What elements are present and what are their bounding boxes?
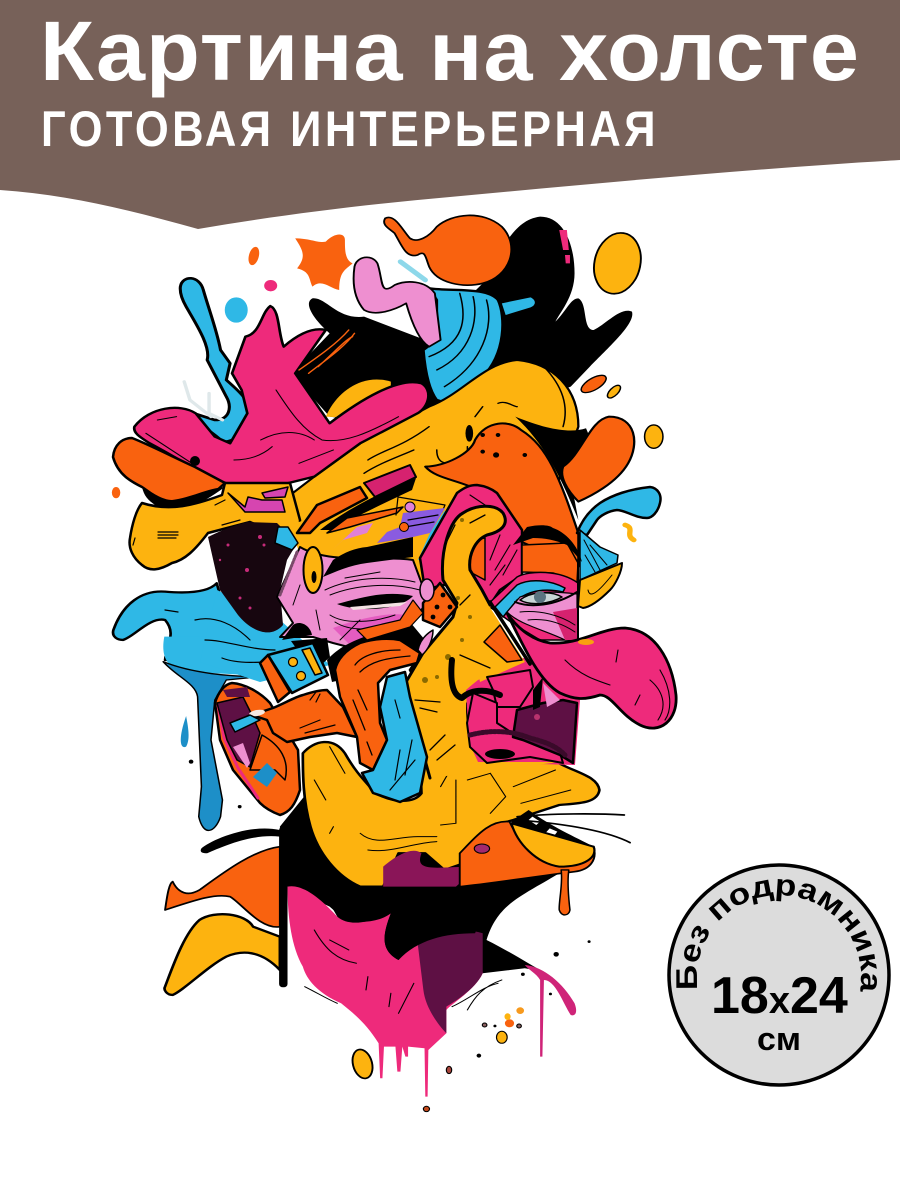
lip eye mark — [190, 456, 200, 466]
ear inner dark — [217, 697, 260, 767]
yellow backing behind brow — [290, 498, 445, 600]
subtitle: ГОТОВАЯ ИНТЕРЬЕРНАЯ — [41, 101, 659, 157]
right side curl, page coordinates — [577, 487, 661, 608]
dotted hair block — [208, 522, 297, 632]
dish lines — [429, 293, 489, 387]
blue drop — [181, 716, 189, 747]
pink splash contour lines — [146, 390, 399, 463]
lower left orange shape — [165, 847, 280, 927]
cheek hatching — [300, 692, 335, 733]
blue splash with fork — [180, 278, 251, 442]
neck hatch lines — [305, 930, 502, 1013]
small blue piece — [275, 527, 298, 550]
blue patch under hair — [200, 590, 330, 682]
hair stitching on face edge — [280, 552, 297, 595]
tongue hatching — [390, 700, 415, 790]
purple patch — [377, 508, 445, 543]
pink speckles — [219, 535, 266, 610]
forehead lines — [364, 367, 565, 473]
blue tongue — [362, 672, 427, 802]
black splash — [291, 217, 632, 433]
panel hatch — [470, 495, 517, 585]
black mouth — [511, 810, 594, 847]
yellow frame lines — [396, 497, 445, 515]
curved text: Без подрамника — [676, 879, 877, 992]
yellow behind pink — [326, 379, 391, 420]
light pink sliver — [543, 683, 560, 707]
light pink lip — [418, 630, 433, 655]
light pink eye area — [507, 592, 577, 640]
floating dots — [112, 246, 277, 498]
ear inner pink — [233, 743, 250, 768]
small yellow accent on nose — [578, 639, 594, 645]
drip tiny dots: black — [189, 760, 591, 1058]
chin contour lines — [314, 747, 571, 851]
badge circle — [669, 865, 889, 1085]
black drip in neck — [330, 897, 487, 960]
black nose cheek — [533, 677, 543, 710]
left face — [277, 547, 427, 650]
lip spot — [474, 844, 490, 853]
nose lower pink — [467, 693, 563, 763]
face edge line — [577, 560, 579, 640]
orange left lips — [113, 438, 225, 503]
orange hair strokes on black — [299, 330, 354, 373]
black diagonal — [490, 602, 530, 664]
orange head right — [425, 423, 578, 567]
lower lip orange — [460, 822, 595, 887]
swirl hatching — [353, 650, 410, 755]
yellow wedge backing — [468, 595, 525, 682]
orange wedge — [484, 625, 522, 662]
left lips and yellow arm, page coordinates — [113, 438, 300, 569]
white highlight — [296, 684, 337, 700]
face wrinkles — [293, 572, 420, 640]
upper artwork: splashes, hair, forehead — [112, 215, 663, 660]
pink outer panel — [420, 485, 522, 605]
badge: size without stretcher — [667, 863, 891, 1087]
right pink drip — [525, 965, 576, 1057]
title: Картина на холсте — [40, 4, 860, 98]
black band under lips — [142, 487, 225, 508]
oval pupil — [312, 571, 316, 583]
small floating ellipses right — [578, 372, 663, 448]
magenta marks on black — [559, 230, 570, 263]
nose upper pink — [487, 670, 533, 707]
nostril — [485, 749, 515, 759]
illustration: colourful abstract face — [112, 215, 676, 1112]
left vertical black bar — [279, 827, 288, 987]
small pink highlight dot — [534, 714, 540, 720]
orange block — [260, 655, 290, 702]
small blue pipe — [230, 715, 260, 732]
yellow lines — [415, 515, 490, 760]
right eyebrow — [513, 525, 582, 562]
pink big splash — [134, 306, 428, 483]
pink around eye — [487, 572, 578, 640]
arc path for curved text — [697, 895, 861, 990]
hot pink below eye — [553, 608, 577, 640]
dotted orange patch — [423, 583, 457, 627]
lip yellow — [511, 823, 594, 867]
orange band under eye — [357, 600, 423, 640]
purple stripes — [405, 515, 438, 527]
yellow bar on connector — [302, 648, 322, 675]
light pink curl — [354, 257, 441, 347]
face middle, page coordinates — [165, 465, 582, 802]
black streak — [201, 828, 280, 853]
orange cheek panel — [522, 543, 578, 583]
light blue stick — [400, 262, 425, 280]
ridge lines — [584, 540, 607, 572]
nose backing pink — [466, 655, 580, 765]
orange star — [295, 235, 353, 290]
eye lashes — [515, 592, 577, 605]
lower yellow oval — [350, 1048, 375, 1080]
orange brow block — [297, 487, 367, 533]
purple mouth bits — [383, 851, 475, 887]
size number: 18x24 — [711, 967, 848, 1025]
orange column — [470, 538, 485, 580]
main yellow forehead — [284, 360, 578, 533]
orange lip drip — [559, 870, 570, 915]
blue ridged piece — [580, 530, 618, 580]
arm lines — [133, 500, 240, 545]
yellow ridged piece — [578, 563, 622, 608]
lower orange dots — [423, 1007, 524, 1112]
head hair black — [515, 417, 594, 520]
small circles on patch — [400, 502, 415, 532]
orange cheek — [252, 690, 357, 742]
blue left blob — [113, 583, 280, 660]
dark purple neck shadow — [418, 931, 483, 1033]
black neck mass — [280, 793, 559, 1007]
banner shape — [0, 0, 900, 229]
blue eye band — [495, 581, 565, 617]
yellow circle — [589, 230, 646, 297]
black under eye band — [327, 622, 425, 682]
iris — [534, 591, 546, 603]
yellow S outline — [406, 506, 505, 778]
closed eye — [337, 594, 413, 609]
right blue curl — [577, 487, 661, 535]
yellow squiggle — [625, 525, 634, 540]
white tip of cheek — [249, 709, 265, 717]
yellow dots on connector — [288, 658, 306, 680]
ear inner blue — [253, 763, 277, 787]
magenta strip — [364, 465, 416, 497]
blue strip by brow — [418, 510, 445, 560]
unit: см — [757, 1021, 801, 1057]
blue stub — [502, 297, 535, 315]
magenta strip B — [262, 487, 288, 498]
nose tip black — [282, 623, 312, 640]
eye wrinkles — [520, 612, 575, 632]
white teeth — [529, 817, 557, 837]
light blue continuation — [163, 637, 280, 677]
black under brow — [320, 478, 416, 530]
ear top dark — [223, 687, 250, 697]
blue connector — [268, 643, 328, 693]
header banner — [0, 0, 900, 229]
whiskers — [517, 814, 630, 843]
yellow S and centre fill — [406, 506, 560, 778]
dots on orange patch — [431, 593, 452, 619]
eye white strip — [350, 602, 407, 610]
yellow centre dots — [422, 518, 472, 683]
ear, page coordinates — [215, 683, 300, 815]
lower left yellow shape — [165, 914, 280, 995]
yellow oval on temple — [304, 547, 322, 593]
lilac strip — [332, 523, 373, 550]
pink oval beside patch — [420, 579, 434, 601]
orange ear right — [562, 417, 634, 502]
orange ball with tail — [384, 215, 511, 285]
yellow piece line — [588, 575, 612, 594]
blue dish — [423, 288, 503, 402]
left eyebrow — [323, 537, 413, 577]
nose contour lines — [565, 650, 670, 720]
blush — [333, 614, 405, 645]
pink nose blob — [507, 613, 676, 728]
right eye — [520, 593, 562, 604]
dark purple cheek — [513, 700, 577, 763]
moustache hatch — [470, 732, 565, 755]
ear outer — [215, 683, 300, 815]
blue patch lines — [165, 610, 290, 662]
ear inner orange — [250, 735, 286, 780]
yellow chin — [303, 633, 599, 887]
orange thin strip — [327, 507, 403, 533]
black under nose — [291, 638, 330, 672]
white fork — [184, 382, 222, 420]
lower artwork: neck, chin, mouth — [163, 633, 630, 1112]
big blue drip — [163, 662, 261, 830]
nose shape — [507, 613, 676, 728]
black nose arc — [451, 660, 500, 698]
magenta strip A — [228, 493, 285, 512]
forehead dots — [465, 425, 527, 458]
yellow left arm — [130, 483, 300, 569]
pink neck with drips — [288, 886, 483, 1097]
orange swirl — [335, 639, 420, 770]
ear rim pink — [218, 705, 258, 798]
